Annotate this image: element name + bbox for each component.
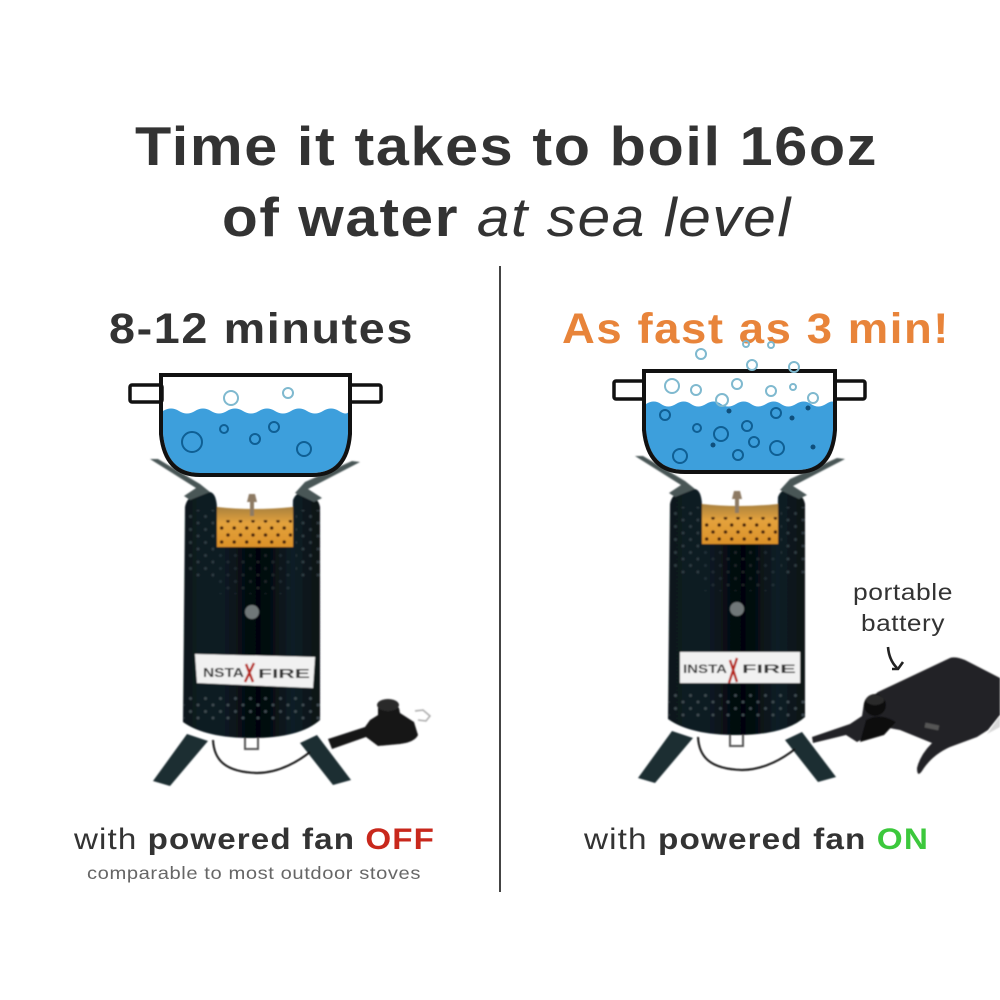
- right stove body: [668, 489, 805, 735]
- left pot: [130, 375, 381, 475]
- caption: fan off: with powered fan OFF: [73, 823, 435, 856]
- right logo label: [680, 652, 800, 683]
- left stove legs: [153, 734, 351, 786]
- left water: [163, 408, 349, 473]
- center divider: [499, 266, 501, 892]
- right logo label: FIRE: [742, 662, 796, 676]
- right bubbles: [660, 341, 818, 463]
- right bracket: [730, 735, 743, 746]
- left fan switch: [328, 699, 430, 749]
- left burner nozzle: [247, 494, 257, 516]
- battery label: [853, 579, 953, 636]
- left pot outline: [161, 375, 350, 475]
- battery arrow: [888, 647, 903, 669]
- right stove legs: [638, 731, 836, 783]
- left center bolt: [245, 605, 259, 619]
- right pot outline: [644, 371, 835, 472]
- right water: [646, 402, 834, 470]
- right stove group: [635, 456, 845, 783]
- title: Time it takes to boil 16oz: [135, 115, 878, 177]
- right burner window: [702, 504, 778, 544]
- battery label: battery: [861, 610, 945, 636]
- right center bolt: [730, 602, 744, 616]
- caption: fan on: with powered fan ON: [583, 823, 929, 856]
- right pot: [614, 341, 865, 472]
- left logo label: FIRE: [258, 666, 311, 681]
- right pot handles: [614, 381, 865, 399]
- left bracket: [245, 738, 258, 749]
- right logo label: INSTA: [683, 662, 727, 676]
- heading: 8-12 minutes: 8-12 minutes: [109, 305, 414, 353]
- left pot supports: [150, 459, 360, 502]
- battery label: portable: [853, 579, 953, 605]
- left stove body: [183, 492, 320, 738]
- left logo label: NSTA: [203, 665, 245, 680]
- left logo label: [195, 654, 315, 688]
- left cord loop: [213, 740, 310, 773]
- right stove with fan on: [635, 456, 1000, 783]
- right cord loop: [698, 737, 795, 770]
- sub caption: comparable to most outdoor stoves: [87, 863, 421, 883]
- title: [135, 115, 878, 248]
- title: of water at sea level: [222, 186, 792, 248]
- right pot supports: [635, 456, 845, 499]
- left pot handles: [130, 385, 381, 402]
- left stove with fan off: [150, 459, 430, 786]
- portable battery: [812, 657, 1000, 774]
- left burner window: [217, 507, 293, 547]
- right burner nozzle: [732, 491, 742, 513]
- left bubbles: [182, 388, 311, 456]
- heading: as fast as 3 min: As fast as 3 min!: [562, 305, 950, 353]
